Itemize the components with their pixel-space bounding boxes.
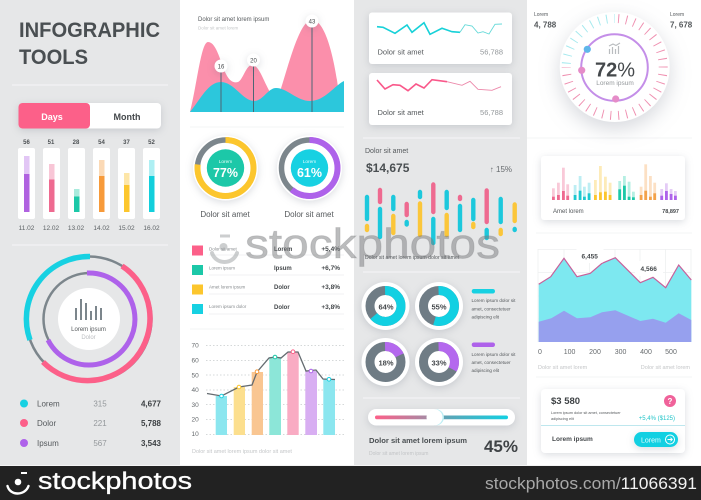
table: rows: Dolor bbox=[274, 305, 290, 311]
table: rows bbox=[192, 246, 344, 314]
area chart: cyan and purple: 300 bbox=[615, 349, 627, 356]
donut: 61%: Lorem bbox=[303, 159, 316, 165]
donut: 77%: 77% bbox=[213, 166, 238, 180]
combo chart: bars and line: 40 bbox=[192, 387, 199, 394]
area chart: cyan and purple: 100 bbox=[564, 349, 576, 356]
area chart: cyan and purple: Dolor sit amet lorem bbox=[538, 365, 588, 371]
stat: $14,675: $14,675 bbox=[366, 161, 410, 175]
bar chart: days: 51 bbox=[48, 140, 55, 146]
toggle: days / month bbox=[18, 103, 161, 128]
title: TOOLS bbox=[19, 46, 88, 69]
donut set: cyan bbox=[362, 282, 516, 330]
card: cyan sparkline bbox=[369, 12, 512, 64]
table: rows: +3,8% bbox=[321, 304, 340, 311]
area chart: peaks: 20 bbox=[250, 58, 257, 64]
table: rows: Lorem ipsum bbox=[209, 266, 235, 270]
title bbox=[19, 19, 160, 69]
bar chart: days: 13.02 bbox=[68, 225, 85, 232]
stat: 7,678 bbox=[670, 12, 693, 30]
card: $3 580: +5,4% ($125) bbox=[639, 416, 675, 422]
footer band: stockphotos bbox=[38, 468, 192, 495]
combo chart: bars and line: 50 bbox=[192, 372, 199, 380]
legend table: 3,543 bbox=[141, 439, 162, 448]
bar chart: days: 16.02 bbox=[143, 225, 160, 232]
pill chart bbox=[365, 184, 515, 261]
toggle: days / month: Month bbox=[114, 112, 140, 122]
card: grouped bars: 78,897 bbox=[662, 209, 679, 215]
combo chart: bars and line: Dolor sit amet lorem ipsum dolor sit amet bbox=[192, 449, 292, 455]
bar chart: days: 56 bbox=[23, 140, 30, 146]
donut: 77%: Dolor sit amet bbox=[200, 210, 250, 219]
card: cyan sparkline: Dolor sit amet bbox=[378, 48, 425, 56]
donut: 61%: 61% bbox=[297, 166, 322, 180]
watermark: stockphotos bbox=[245, 220, 500, 267]
card: $3 580: Lorem ipsum dolor sit amet, consectetuer bbox=[551, 411, 621, 415]
donut set: purple bbox=[362, 338, 516, 386]
area chart: cyan and purple: 500 bbox=[665, 349, 677, 356]
footer band bbox=[0, 465, 701, 500]
donut set: purple: 18% bbox=[378, 358, 394, 368]
donut set: purple: Lorem ipsum dolor sit bbox=[472, 352, 516, 357]
card: pink sparkline: 56,788 bbox=[480, 108, 503, 117]
table: rows: +3,8% bbox=[321, 284, 340, 291]
combo chart: bars and line bbox=[192, 342, 344, 455]
table: rows: Amet lorem ipsum bbox=[209, 284, 246, 290]
stat: $14,675: ↑ 15% bbox=[490, 165, 512, 174]
combo chart: bars and line: 20 bbox=[192, 416, 199, 424]
area chart: cyan and purple: 4,566 bbox=[641, 266, 657, 273]
table: rows: Ipsum bbox=[274, 266, 292, 272]
area chart: cyan and purple: 400 bbox=[640, 349, 652, 356]
legend table: Dolor bbox=[37, 419, 56, 428]
table: rows: Lorem bbox=[274, 247, 292, 253]
table: rows: Lorem ipsum dolor bbox=[209, 304, 247, 309]
combo chart: bars and line: 70 bbox=[192, 342, 199, 350]
bar chart: days bbox=[18, 140, 160, 232]
area chart: peaks: 43 bbox=[309, 20, 316, 26]
bar chart: days: 15.02 bbox=[118, 225, 135, 232]
legend table: 4,677 bbox=[141, 400, 162, 408]
title: INFOGRAPHIC bbox=[19, 19, 160, 42]
area chart: cyan and purple bbox=[538, 248, 691, 371]
donut: 77% bbox=[193, 136, 258, 219]
stat: 4,788: 4, 788 bbox=[534, 20, 557, 30]
pill chart: Dolor sit amet lorem ipsum dolor sit amet bbox=[365, 255, 460, 261]
card: $3 580: Lorem bbox=[641, 438, 661, 444]
card: pink sparkline: Dolor sit amet bbox=[378, 108, 425, 117]
area chart: cyan and purple: 0 bbox=[538, 349, 542, 356]
footer band: stockphotos.com/ 11066391 bbox=[485, 475, 697, 493]
combo chart: bars and line: 60 bbox=[192, 358, 199, 364]
stat: 4,788 bbox=[534, 12, 557, 30]
table: rows: +6,7% bbox=[321, 265, 340, 272]
stat: $14,675 bbox=[365, 148, 512, 175]
double ring chart: Dolor bbox=[81, 335, 96, 341]
donut set: cyan: Lorem ipsum dolor sit bbox=[472, 298, 516, 303]
gauge: 72% bbox=[560, 12, 670, 122]
legend table: 5,788 bbox=[141, 419, 162, 428]
legend table: 315 bbox=[93, 400, 107, 408]
donut set: cyan: amet, consectetuer bbox=[472, 306, 511, 312]
area chart: peaks: Dolor sit amet lorem ipsum bbox=[198, 17, 269, 23]
bar chart: days: 12.02 bbox=[43, 225, 60, 232]
stat: 7,678: Lorem bbox=[670, 12, 684, 18]
donut set: purple: amet, consectetuer bbox=[472, 360, 511, 365]
gauge: 72%: Lorem ipsum bbox=[596, 80, 634, 87]
donut: 61% bbox=[277, 136, 342, 219]
bar chart: days: 28 bbox=[73, 140, 80, 146]
slider caption with 45%: Dolor sit amet lorem ipsum bbox=[369, 436, 467, 445]
stat: $14,675: Dolor sit amet bbox=[365, 148, 408, 155]
bar chart: days: 52 bbox=[148, 140, 155, 146]
card: $3 580: ? bbox=[668, 397, 673, 406]
stat: 4,788: Lorem bbox=[534, 12, 548, 18]
bar chart: days: 54 bbox=[98, 140, 105, 146]
bar chart: days: 14.02 bbox=[93, 225, 110, 232]
card: grouped bars bbox=[541, 156, 685, 220]
card: $3 580: Lorem ipsum bbox=[552, 436, 593, 443]
bar chart: days: 37 bbox=[123, 140, 130, 146]
table: rows: +5,4% bbox=[321, 246, 340, 253]
legend table: Lorem bbox=[37, 400, 60, 408]
donut: 61%: Dolor sit amet bbox=[284, 210, 334, 219]
card: cyan sparkline: 56,788 bbox=[480, 48, 503, 56]
double ring chart: Lorem ipsum bbox=[71, 327, 106, 333]
card: pink sparkline bbox=[369, 73, 512, 125]
donut set: cyan: 64% bbox=[378, 302, 394, 312]
area chart: peaks: Dolor sit amet lorem bbox=[198, 26, 239, 30]
double ring chart bbox=[26, 256, 151, 382]
gauge: 72%: 72% bbox=[595, 60, 635, 82]
legend table: 221 bbox=[93, 419, 107, 428]
area chart: cyan and purple: Dolor sit amet lorem bbox=[641, 365, 690, 371]
legend table bbox=[20, 400, 162, 448]
stat: 7,678: 7, 678 bbox=[670, 20, 693, 30]
area chart: peaks: 16 bbox=[218, 64, 225, 70]
slider caption with 45%: 45% bbox=[484, 437, 518, 456]
table: rows: Dolor bbox=[274, 285, 290, 291]
legend table: Ipsum bbox=[37, 439, 59, 448]
bar chart: days: 11.02 bbox=[19, 225, 35, 232]
card: grouped bars: Amet lorem bbox=[553, 209, 584, 215]
toggle: days / month: Days bbox=[41, 112, 63, 122]
donut set: purple: adipiscing elit bbox=[472, 368, 500, 373]
table: rows: Dolor sit amet bbox=[209, 246, 238, 252]
slider caption with 45%: Dolor sit amet lorem ipsum bbox=[369, 451, 428, 457]
donut: 77%: Lorem bbox=[219, 159, 232, 165]
card: $3 580: $3 580 bbox=[551, 396, 580, 407]
slider caption with 45% bbox=[369, 436, 518, 457]
combo chart: bars and line: 10 bbox=[192, 431, 199, 438]
legend table: 567 bbox=[93, 439, 107, 448]
combo chart: bars and line: 30 bbox=[192, 402, 199, 409]
area chart: cyan and purple: 200 bbox=[589, 349, 601, 356]
card: $3 580 bbox=[541, 389, 685, 453]
area chart: peaks bbox=[190, 14, 344, 112]
area chart: cyan and purple: 6,455 bbox=[582, 254, 598, 260]
card: $3 580: adipiscing elit bbox=[551, 417, 575, 421]
donut set: cyan: adipiscing elit bbox=[472, 314, 500, 320]
donut set: purple: 33% bbox=[431, 358, 447, 368]
donut set: cyan: 55% bbox=[431, 302, 447, 312]
